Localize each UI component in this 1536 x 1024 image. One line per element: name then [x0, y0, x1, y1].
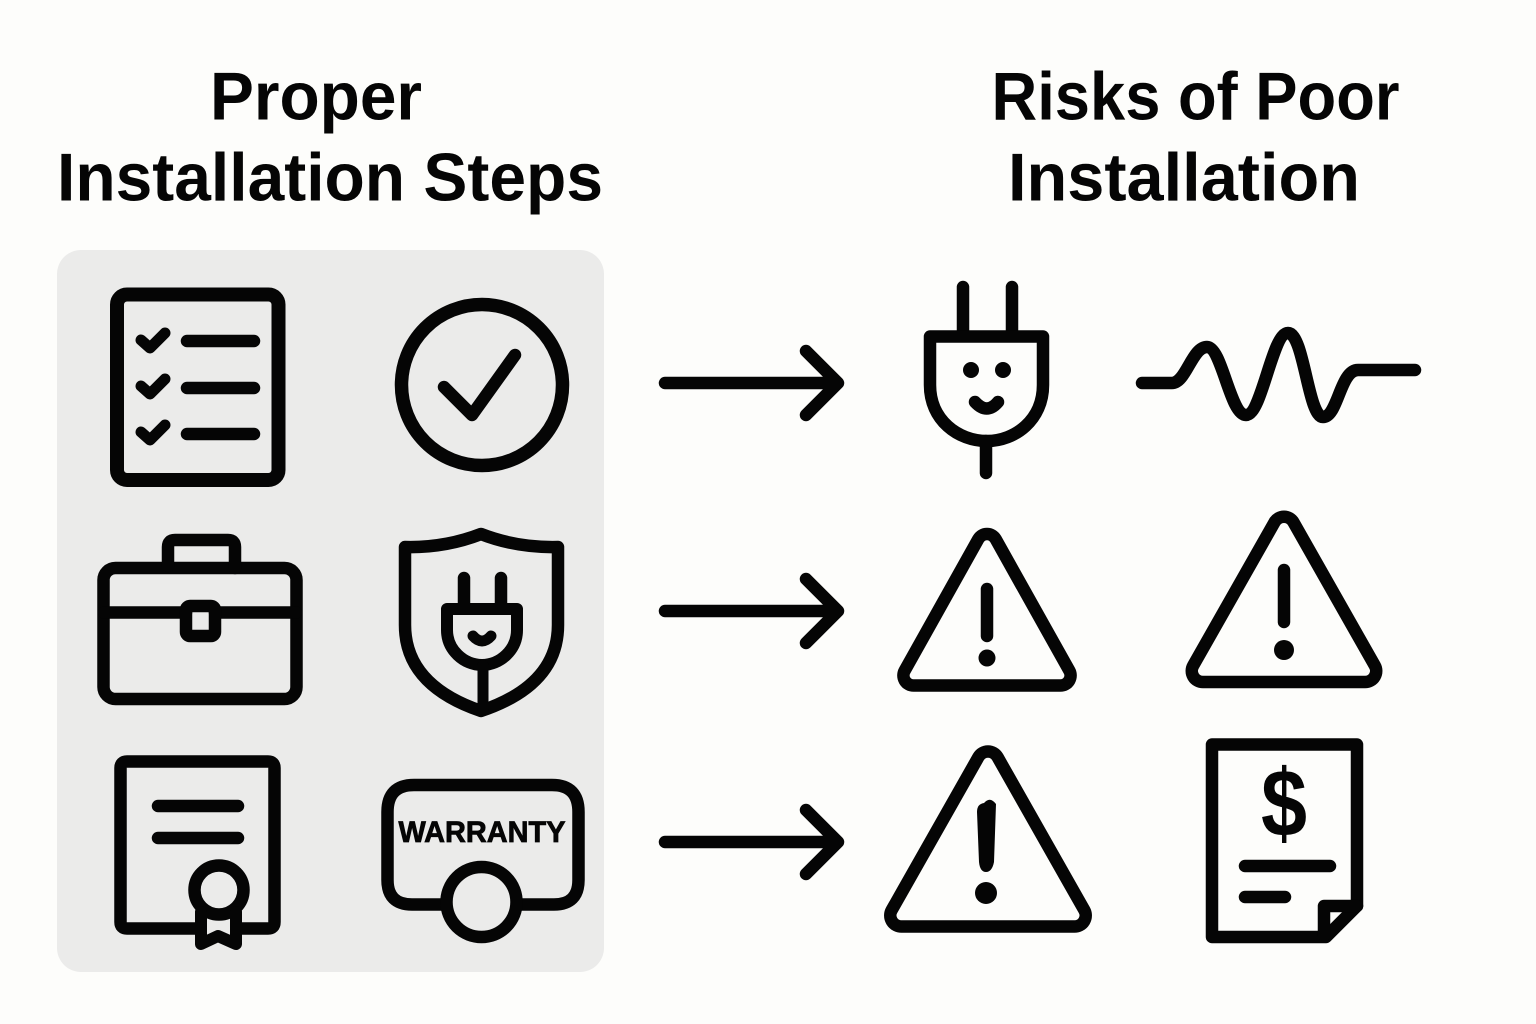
icon: plug with face	[930, 287, 1043, 473]
icon: warranty badge	[388, 785, 578, 937]
icon: warranty badge: WARRANTY	[398, 816, 566, 849]
icon: toolbox	[104, 540, 296, 699]
heading: risks of poor installation	[992, 58, 1400, 216]
heading: proper installation steps: Installation Steps	[57, 140, 603, 216]
icon: checklist	[117, 294, 278, 480]
arrow: bottom row	[665, 810, 838, 874]
arrow: top row	[665, 351, 838, 415]
heading: proper installation steps: Proper	[210, 58, 422, 134]
icon: warning triangle, middle right	[1192, 517, 1376, 682]
panel: proper installation steps	[57, 250, 604, 972]
icon: certificate	[120, 762, 274, 944]
icon: warning triangle, middle left	[903, 534, 1071, 686]
icon: shield with plug	[405, 534, 558, 711]
arrow: middle row	[665, 579, 838, 643]
heading: risks of poor installation: Risks of Poor	[992, 58, 1400, 134]
heading: proper installation steps	[57, 58, 603, 216]
icon: check circle	[402, 304, 562, 466]
icon: invoice with dollar	[1212, 744, 1357, 937]
heading: risks of poor installation: Installation	[1008, 140, 1360, 216]
icon: invoice with dollar: $	[1261, 750, 1307, 857]
icon: erratic signal wave	[1142, 333, 1415, 417]
icon: warning triangle, bottom left	[890, 751, 1086, 927]
